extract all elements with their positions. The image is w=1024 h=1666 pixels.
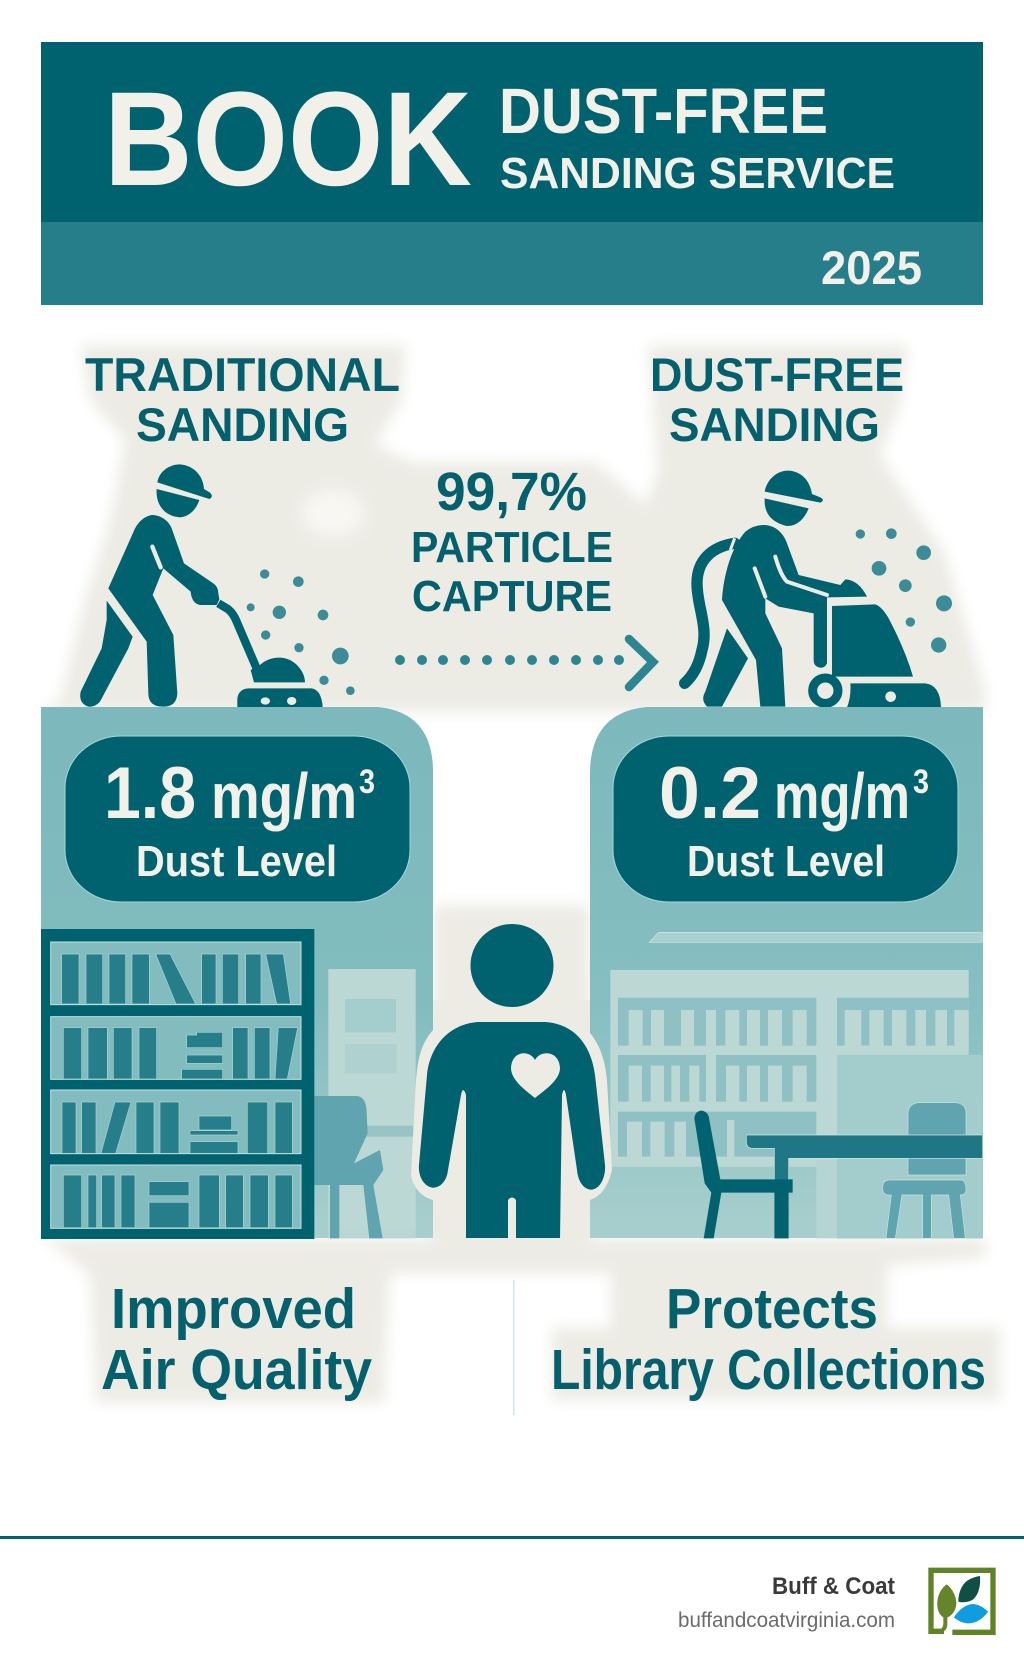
benefit: protects library collections: Protects	[666, 1277, 878, 1341]
dust level badge	[65, 736, 410, 902]
header banner	[41, 42, 983, 305]
callout: 99,7% particle capture: CAPTURE	[412, 572, 612, 621]
dust level badge: Dust Level	[687, 837, 885, 886]
dust level badge: 1.8	[104, 753, 196, 834]
icon: worker with traditional sander	[80, 464, 355, 707]
icon: worker with dust-free sander	[685, 471, 952, 707]
heading: BOOK: BOOK	[104, 65, 472, 214]
footer brand text: buffandcoatvirginia.com	[678, 1609, 895, 1632]
icon: person with heart	[411, 924, 612, 1238]
callout: 99,7% particle capture: PARTICLE	[411, 523, 613, 572]
heading: traditional sanding	[85, 348, 400, 451]
heading: traditional sanding: TRADITIONAL	[85, 348, 400, 401]
background: soft beige wash	[41, 345, 1000, 1403]
dust level badge: mg/m	[774, 760, 910, 832]
dust level badge: Dust Level	[136, 837, 337, 886]
year label: 2025	[821, 241, 922, 294]
near chair	[694, 1111, 793, 1238]
heading: dust-free sanding: SANDING	[669, 398, 880, 451]
dust level badge: 0.2	[659, 753, 761, 834]
callout: 99,7% particle capture: 99,7%	[436, 462, 587, 522]
heading: dust-free sanding: DUST-FREE	[650, 348, 904, 401]
captured particles	[856, 528, 952, 653]
panel: dust-free room	[590, 707, 983, 1238]
heading: DUST-FREE: DUST-FREE	[499, 75, 828, 147]
heading: traditional sanding: SANDING	[136, 398, 349, 451]
benefit: protects library collections	[551, 1277, 986, 1402]
far chair	[883, 1103, 966, 1238]
footer brand text: Buff & Coat	[772, 1573, 895, 1600]
dust particles	[247, 569, 355, 695]
heading: dust-free sanding	[650, 348, 904, 451]
arrow: dotted arrow to dust-free	[395, 639, 653, 687]
table	[746, 1135, 983, 1238]
dust level badge: 3	[913, 763, 929, 801]
footer brand text	[678, 1573, 895, 1632]
benefit: improved air quality	[101, 1277, 372, 1402]
benefit: improved air quality: Air Quality	[101, 1338, 372, 1402]
panel: traditional sanding room	[41, 707, 433, 1239]
library scene	[610, 932, 983, 1238]
icon: company logo	[931, 1570, 993, 1633]
background window and chair	[314, 969, 416, 1238]
bookcase	[41, 929, 314, 1239]
dust level badge: mg/m	[211, 760, 357, 832]
benefit: improved air quality: Improved	[111, 1277, 356, 1341]
dust level badge	[613, 736, 958, 902]
callout: 99,7% particle capture	[411, 462, 613, 621]
dust level badge: 3	[359, 763, 375, 801]
heading: SANDING SERVICE: SANDING SERVICE	[500, 149, 895, 198]
